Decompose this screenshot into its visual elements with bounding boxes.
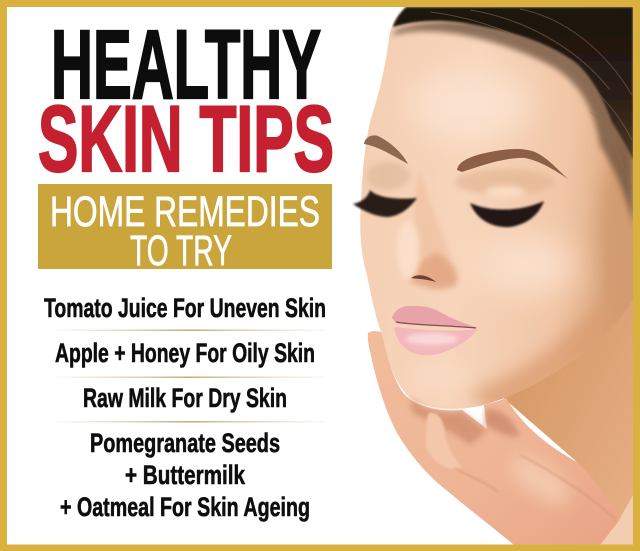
hair mass	[393, 7, 633, 160]
item: pomegranate, buttermilk, oatmeal: + Buttermilk	[125, 460, 246, 490]
hand	[368, 331, 618, 545]
eyebrow: left	[364, 135, 408, 164]
nose highlight	[397, 222, 419, 278]
subtitle banner: TO TRY	[130, 227, 232, 275]
title line: healthy: HEALTHY	[51, 10, 321, 119]
title	[38, 10, 334, 191]
eye socket shadow	[455, 169, 555, 195]
hair fringe blur	[392, 21, 633, 225]
item: raw milk: Raw Milk For Dry Skin	[83, 383, 287, 413]
lips	[392, 306, 478, 355]
lash line and lashes	[353, 190, 417, 217]
remedies list	[44, 293, 326, 522]
lash line and lashes	[470, 201, 544, 227]
eye: left	[353, 190, 417, 217]
nostril	[411, 275, 436, 282]
palm highlight	[509, 454, 572, 508]
eyebrow: right	[457, 149, 568, 179]
banner text: HOME REMEDIES	[50, 188, 320, 236]
hair strands	[430, 9, 632, 190]
title line: skin tips: SKIN TIPS	[38, 86, 334, 191]
lower neck highlight	[600, 495, 633, 545]
palm and fingers	[368, 331, 618, 545]
chin highlight	[429, 375, 432, 376]
eyelid highlight	[485, 186, 525, 198]
neck	[500, 290, 633, 545]
hair	[392, 7, 633, 225]
item: tomato juice: Tomato Juice For Uneven Skin	[44, 293, 326, 323]
lower lip highlight	[406, 333, 458, 345]
cheek highlight	[475, 235, 575, 295]
lower lip	[394, 327, 478, 355]
hand shadow under chin	[410, 398, 487, 445]
forehead highlight	[410, 70, 530, 140]
temple shadow	[594, 162, 633, 310]
item: pomegranate, buttermilk, oatmeal	[60, 428, 310, 522]
knuckle crease	[455, 455, 616, 520]
lip parting	[396, 322, 476, 328]
banner background	[38, 184, 332, 269]
face skin	[360, 7, 633, 409]
jaw shadow	[468, 296, 618, 407]
face shading	[366, 70, 640, 420]
nose side shadow	[414, 176, 452, 264]
second finger	[426, 413, 462, 469]
item: pomegranate, buttermilk, oatmeal: + Oatmeal For Skin Ageing	[60, 492, 310, 522]
item: pomegranate, buttermilk, oatmeal: Pomegranate Seeds	[90, 428, 280, 458]
item: apple and honey: Apple + Honey For Oily Skin	[55, 338, 315, 368]
upper lip	[392, 306, 478, 328]
portrait: woman's face with hand on chin	[353, 7, 640, 545]
subtitle banner	[38, 184, 332, 275]
eye: right	[470, 186, 544, 227]
